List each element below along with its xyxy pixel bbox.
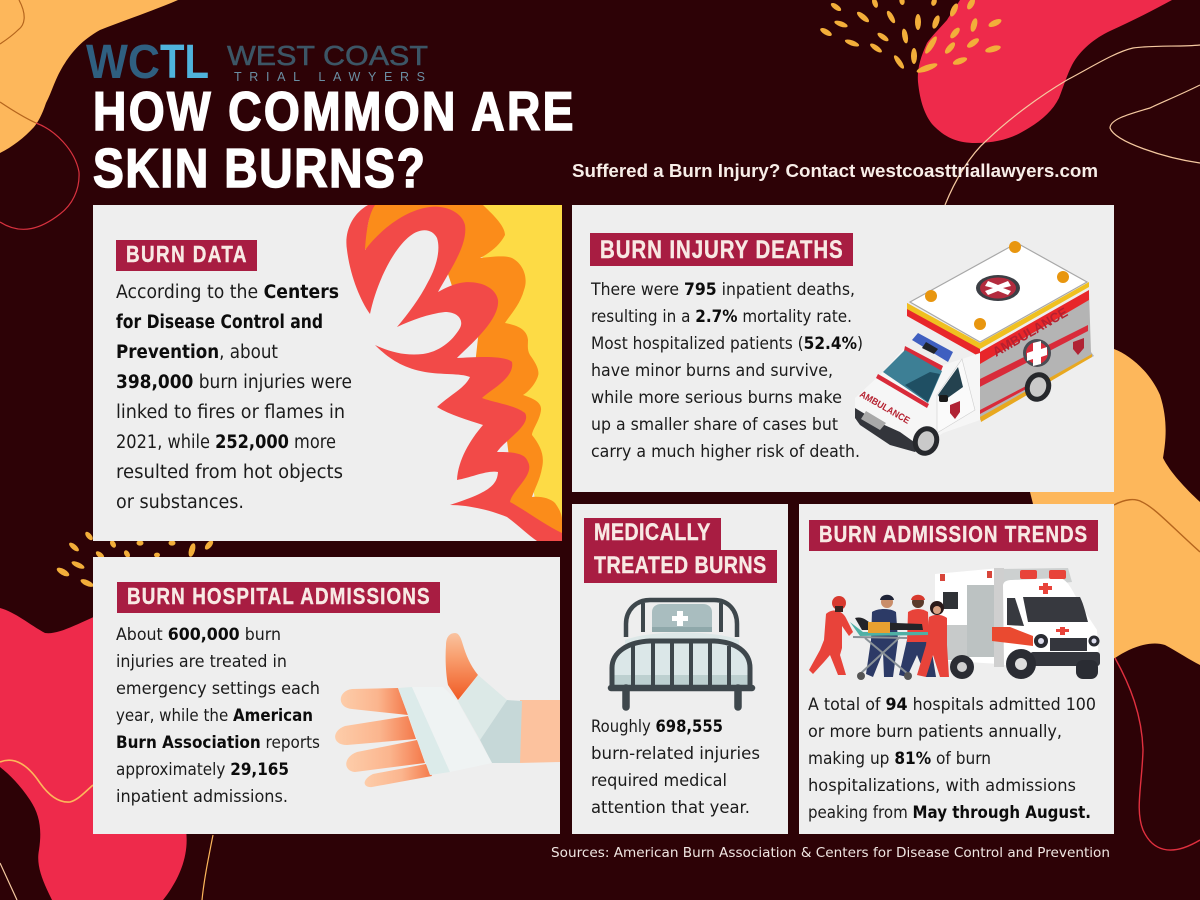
text: burn injury deaths: [590, 280, 863, 461]
illustration: isometric ambulance: AMBULANCE: [990, 305, 1070, 360]
text: burn injury deaths: have minor burns and survive,: [591, 361, 833, 380]
text: burn admission trends: [808, 695, 1096, 822]
logo: TL: [160, 36, 209, 89]
text: burn data: [116, 282, 352, 513]
blob: bottom-left red: [0, 608, 300, 900]
heading: medically treated burns: TREATED BURNS: [594, 551, 766, 578]
text: burn admission trends: peaking from May through August.: [808, 803, 1091, 822]
decoration: yellow dashes left: [55, 530, 215, 588]
text: burn data: linked to fires or flames in: [116, 402, 345, 423]
text: burn injury deaths: There were 795 inpatient deaths,: [590, 280, 855, 299]
panel: burn injury deaths: [572, 205, 1114, 492]
text: burn injury deaths: up a smaller share of cases but: [591, 415, 839, 434]
text: burn hospital admissions: Burn Association reports: [116, 733, 320, 752]
text: burn data: 398,000 burn injuries were: [116, 372, 352, 393]
text: burn data: or substances.: [116, 492, 244, 513]
text: burn injury deaths: resulting in a 2.7% mortality rate.: [591, 307, 852, 326]
illustration: isometric ambulance: AMBULANCE: [858, 389, 911, 427]
logo: WC: [86, 36, 160, 89]
panel: burn data: [93, 205, 562, 541]
contact line: Suffered a Burn Injury? Contact westcoasttriallawyers.com: [572, 161, 1098, 181]
text: medically treated burns: [591, 717, 760, 817]
heading: burn hospital admissions: BURN HOSPITAL ADMISSIONS: [127, 584, 430, 609]
text: burn hospital admissions: About 600,000 burn: [116, 625, 281, 644]
text: burn admission trends: making up 81% of burn: [808, 749, 991, 768]
logo: WEST COAST: [227, 40, 428, 71]
text: medically treated burns: Roughly 698,555: [591, 717, 723, 736]
illustration: hospital bed: [611, 600, 752, 707]
illustration: bandaged hand: [335, 633, 560, 787]
title: SKIN BURNS?: [93, 137, 425, 199]
text: burn hospital admissions: [116, 625, 320, 806]
illustration: flames: [346, 205, 562, 541]
text: medically treated burns: attention that year.: [591, 798, 750, 817]
text: burn data: According to the Centers: [116, 282, 339, 303]
paramedic team with stretcher: [809, 595, 949, 680]
heading: burn injury deaths: BURN INJURY DEATHS: [600, 235, 843, 263]
sources line: Sources: American Burn Association & Centers for Disease Control and Prevention: [551, 845, 1110, 861]
title: HOW COMMON ARE: [93, 80, 573, 142]
text: burn hospital admissions: inpatient admissions.: [116, 787, 288, 806]
heading: burn data: BURN DATA: [126, 242, 247, 267]
title: [93, 80, 573, 199]
text: burn injury deaths: while more serious burns make: [591, 388, 842, 407]
heading: medically treated burns: [584, 518, 777, 583]
text: burn data: for Disease Control and: [116, 312, 323, 333]
text: burn hospital admissions: approximately 29,165: [116, 760, 289, 779]
heading: burn admission trends: BURN ADMISSION TRENDS: [819, 522, 1087, 547]
text: burn admission trends: A total of 94 hospitals admitted 100: [808, 695, 1096, 714]
text: medically treated burns: required medical: [591, 771, 727, 790]
text: burn data: 2021, while 252,000 more: [116, 432, 336, 453]
panel: burn hospital admissions: [93, 557, 560, 834]
text: burn hospital admissions: injuries are treated in: [116, 652, 287, 671]
text: burn hospital admissions: year, while the American: [116, 706, 313, 725]
logo: [86, 36, 428, 89]
text: burn data: resulted from hot objects: [116, 462, 343, 483]
text: burn data: Prevention, about: [116, 342, 278, 363]
text: burn injury deaths: carry a much higher risk of death.: [591, 442, 860, 461]
heading: burn data: [116, 240, 257, 271]
illustration: isometric ambulance: [855, 241, 1094, 460]
text: burn admission trends: or more burn patients annually,: [808, 722, 1062, 741]
text: burn hospital admissions: emergency settings each: [116, 679, 320, 698]
text: burn injury deaths: Most hospitalized patients (52.4%): [591, 334, 863, 353]
blob: right orange: [1030, 349, 1200, 665]
panel: burn admission trends: [799, 504, 1114, 834]
illustration: paramedics and ambulance: [809, 568, 1100, 680]
blob: top-left orange: [0, 0, 178, 153]
decoration: yellow dashes top right: [819, 0, 1003, 75]
text: medically treated burns: burn-related injuries: [591, 744, 760, 763]
text: burn admission trends: hospitalizations, with admissions: [808, 776, 1076, 795]
panel: medically treated burns: [572, 504, 788, 834]
heading: medically treated burns: MEDICALLY: [594, 518, 711, 545]
logo: TRIAL LAWYERS: [234, 70, 425, 84]
blob: top-right red: [918, 0, 1172, 143]
